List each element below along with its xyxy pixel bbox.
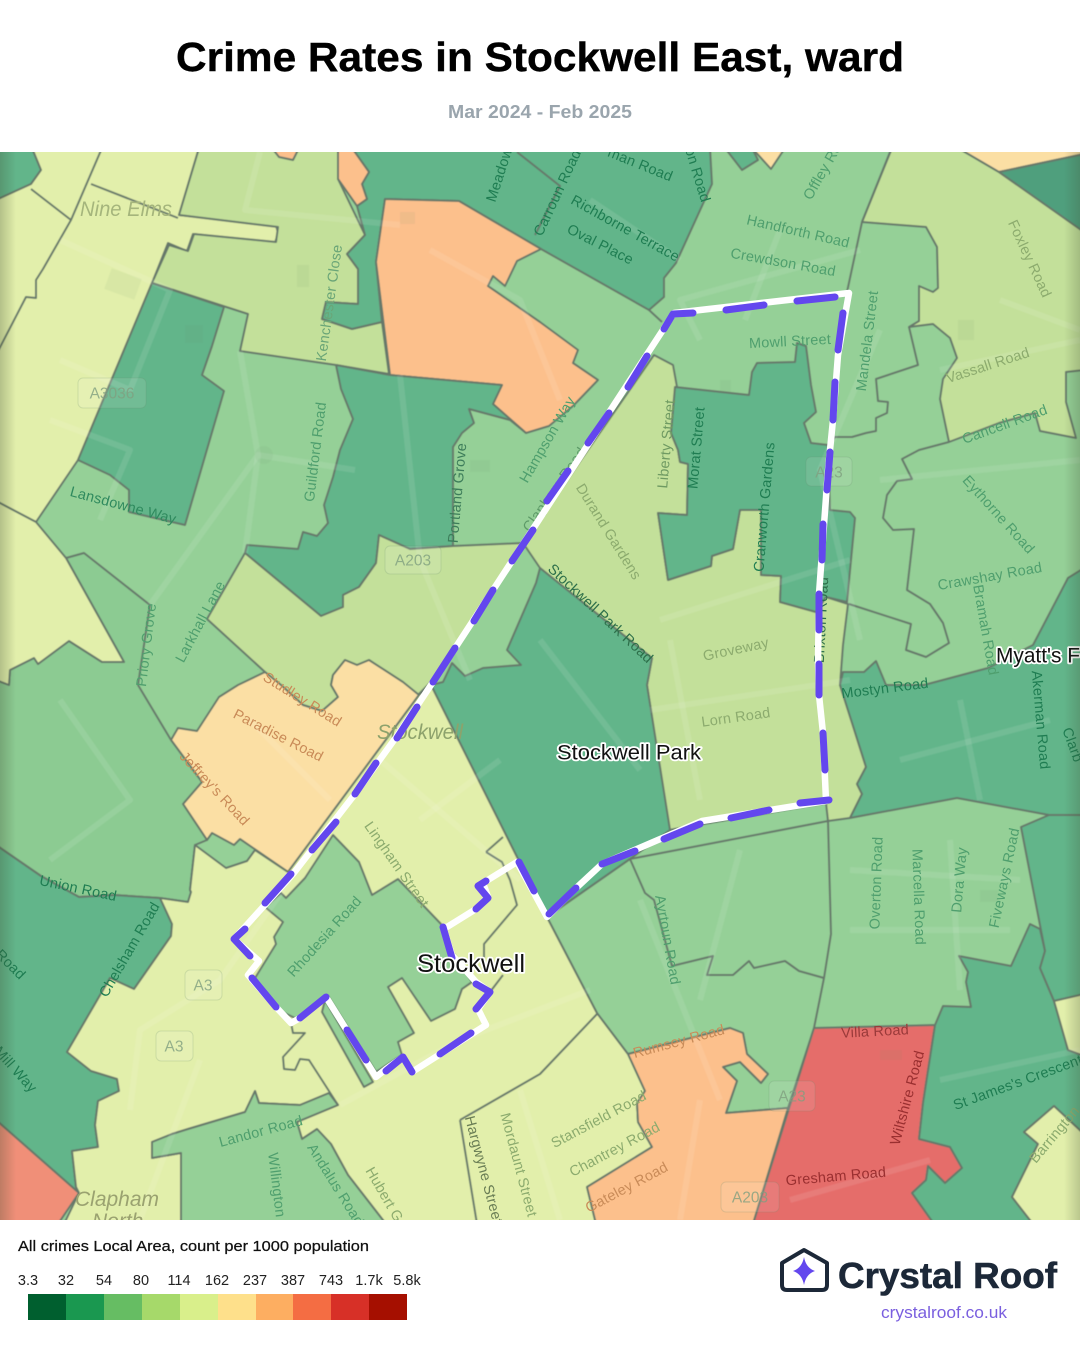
area: south yellow <box>64 685 652 1224</box>
road labels on light areas: Lorn Road <box>700 705 772 731</box>
area: A3036 dark green <box>78 283 224 525</box>
boundary lines <box>0 148 949 1224</box>
road labels on orange and red areas: Villa Road <box>841 1022 909 1042</box>
area: small orange top <box>338 152 368 206</box>
road labels on dark green: Mostyn Road <box>841 676 929 702</box>
legend scale labels: 80 <box>133 1273 149 1289</box>
area: red Gresham Road <box>753 1025 962 1224</box>
road labels on dark green: Cranworth Gardens <box>751 442 779 572</box>
title: Crime Rates in Stockwell East, ward <box>176 34 904 80</box>
area: light green inside ward <box>523 355 866 830</box>
road labels on dark green: Chelsham Road <box>96 900 164 1000</box>
legend scale labels: 32 <box>58 1273 74 1289</box>
area: Rhodesia Road mid green <box>255 835 472 1072</box>
area: Foxley Road light green <box>862 148 1080 442</box>
edge vignette <box>0 152 1080 1220</box>
area: orange north centre <box>376 199 598 433</box>
road labels on mid green: Crewdson Road <box>729 246 837 280</box>
subtitle: date range: Mar 2024 - Feb 2025 <box>448 102 632 122</box>
road labels on orange and red areas: Wiltshire Road <box>888 1049 928 1147</box>
road labels on mid green: Ayrtoun Road <box>651 894 683 986</box>
ward boundary: white base line <box>234 293 849 1077</box>
road labels on mid green: Rhodesia Road <box>285 894 365 980</box>
place names in italics <box>75 198 464 1233</box>
area: top-right pale orange <box>966 152 1080 172</box>
road labels on light areas: Foxley Road <box>1004 218 1054 300</box>
road labels on mid green: Andalus Road <box>303 1141 367 1229</box>
logo icon: house with star <box>782 1250 827 1290</box>
area: light green north-west <box>152 148 389 374</box>
area: left dark green <box>0 845 172 1193</box>
road labels on mid green: Cancell Road <box>960 402 1050 448</box>
road labels on mid green: Lansdowne Way <box>68 484 178 528</box>
road labels on dark green <box>0 145 1080 1114</box>
road labels on orange and red areas: Studley Road <box>260 670 344 730</box>
area: lower left yellow wedge <box>0 501 124 685</box>
road labels on orange and red areas: Rumsey Road <box>631 1022 727 1062</box>
road labels on mid green: Willington <box>264 1152 288 1218</box>
area: top dark notch <box>726 152 760 172</box>
road labels on light areas: Vassall Road <box>944 345 1032 387</box>
road labels on dark green: Carroun Road <box>531 147 585 239</box>
place names with halo: Stockwell Park <box>557 742 702 764</box>
area: bottom-left salmon <box>0 1120 79 1224</box>
area: dark green north centre <box>322 148 712 329</box>
website link: crystalroof.co.uk <box>881 1304 1008 1322</box>
road labels on dark green: Union Road <box>38 873 118 905</box>
area: Landor Road mid green <box>264 1102 297 1104</box>
area: dark green centre <box>245 365 526 616</box>
place names in italics: Clapham <box>75 1188 159 1211</box>
road labels on dark green: Richborne Terrace <box>568 193 682 265</box>
road labels on mid green <box>68 141 1050 1229</box>
place names with halo: Myatt's F <box>996 644 1080 668</box>
road labels on mid green: Offley Ro <box>801 141 845 203</box>
area: south-east yellow patches <box>1012 1106 1080 1224</box>
road labels on orange and red areas: Paradise Road <box>230 707 326 765</box>
legend scale labels: 54 <box>96 1273 112 1289</box>
road labels on mid green: Marcella Road <box>908 849 928 945</box>
place names in italics: North <box>92 1210 143 1233</box>
road labels on light areas: Durand Gardens <box>572 481 644 583</box>
area: bottom orange <box>587 1028 788 1224</box>
legend colour ramp <box>28 1294 407 1320</box>
road labels on dark green: Meadow <box>484 146 516 204</box>
road labels on mid green: Landor Road <box>217 1113 305 1151</box>
place names in italics: Nine Elms <box>80 198 172 221</box>
road labels on mid green: Priory Grove <box>134 602 160 688</box>
legend scale labels: 162 <box>205 1273 229 1289</box>
road number shields <box>78 378 852 1212</box>
area: Stockwell Park dark green <box>431 568 670 917</box>
road labels on dark green: man Road <box>605 145 675 185</box>
road number shields: A23 <box>815 464 843 482</box>
road labels on light areas <box>314 218 1080 1229</box>
road number shields: A3 <box>165 1038 183 1056</box>
road labels on light areas: Chantrey Road <box>567 1119 663 1181</box>
road labels on mid green: Crawshay Road <box>937 560 1043 594</box>
area: Nine Elms yellow <box>0 148 278 522</box>
area: top pale orange notch <box>754 152 784 170</box>
place names in italics: Stockwell <box>377 721 464 744</box>
legend scale labels <box>18 1273 421 1289</box>
area: Morat Street dark green <box>658 343 855 612</box>
road labels on mid green: Overton Road <box>867 836 887 930</box>
area: east dark green <box>1021 815 1080 1001</box>
road labels on light areas: Stansfield Road <box>549 1088 649 1152</box>
road labels on dark green: Oval Place <box>564 221 636 269</box>
road labels on light areas: Mordaunt Street <box>496 1111 540 1219</box>
area: Paradise Road pale orange <box>171 660 419 872</box>
road labels on dark green: Liberty Street <box>655 399 679 489</box>
road labels on orange and red areas: Jeffrey's Road <box>176 749 252 829</box>
road labels on mid green: Fiveways Road <box>987 827 1023 929</box>
road labels on dark green: Akerman Road <box>1028 670 1052 770</box>
road labels on orange and red areas: Gateley Road <box>583 1160 671 1216</box>
road labels on mid green: Handforth Road <box>745 212 851 252</box>
road labels on dark green: Stockwell Park Road <box>544 561 656 667</box>
road labels on mid green: Eythorne Road <box>959 473 1037 557</box>
legend scale labels: 114 <box>167 1273 191 1289</box>
road labels on mid green: Hampson Way <box>517 394 579 486</box>
road labels on orange and red areas: Gresham Road <box>785 1165 887 1189</box>
street network overlay <box>50 152 1080 1220</box>
area: top-left dark green corner <box>0 152 40 198</box>
area: south-east dark green <box>912 924 1080 1224</box>
road labels on mid green: Bramah Road <box>969 583 1001 677</box>
road number shields: A203 <box>732 1190 768 1206</box>
road number shields: A3 <box>194 978 212 994</box>
legend scale labels: 5.8k <box>393 1273 421 1289</box>
road labels on light areas: Lingham Street <box>360 819 432 911</box>
road labels on mid green: Mandela Street <box>854 290 882 392</box>
road labels on mid green: Portland Grove <box>446 442 470 544</box>
road labels on light areas: Hargwyne Street <box>461 1114 505 1226</box>
area: lower left mid green <box>0 553 207 902</box>
road number shields: A23 <box>778 1088 806 1106</box>
logo wordmark: Crystal Roof <box>838 1255 1058 1296</box>
road labels on dark green: on Road <box>681 146 713 204</box>
road labels on mid green: Dora Way <box>949 846 971 913</box>
road labels on light areas: Clapham Road <box>520 445 590 535</box>
place names with halo <box>417 644 1080 978</box>
road labels on light areas: Groveway <box>702 635 771 665</box>
road labels on dark green: Brixton Road <box>812 577 832 663</box>
road labels on light areas: Kenchester Close <box>314 244 346 362</box>
legend title: All crimes Local Area, count per 1000 population <box>18 1238 369 1255</box>
road number shields: A203 <box>395 552 431 570</box>
road labels on mid green: Mowll Street <box>749 332 831 352</box>
place names with halo: Stockwell <box>417 950 525 978</box>
legend scale labels: 237 <box>243 1273 267 1289</box>
road labels on orange and red areas <box>176 670 928 1216</box>
legend scale labels: 743 <box>319 1273 343 1289</box>
ward boundary: purple dashes <box>234 297 843 1072</box>
road labels on dark green: Morat Street <box>685 406 709 490</box>
area: Myatt's Fields dark green <box>840 568 1080 818</box>
legend scale labels: 387 <box>281 1273 305 1289</box>
area: top-right dark green <box>999 154 1080 232</box>
road labels on mid green: Guildford Road <box>302 401 330 503</box>
legend scale labels: 1.7k <box>355 1273 383 1289</box>
road number shields: A3036 <box>90 386 134 402</box>
road labels on light areas: Hubert Gr <box>362 1165 408 1229</box>
area: south-east ward mid green <box>631 820 832 1108</box>
legend scale labels: 3.3 <box>18 1273 38 1289</box>
road labels on mid green: Larkhall Lane <box>173 579 229 665</box>
building hints <box>104 212 998 1060</box>
area: light green A203 <box>207 535 523 711</box>
